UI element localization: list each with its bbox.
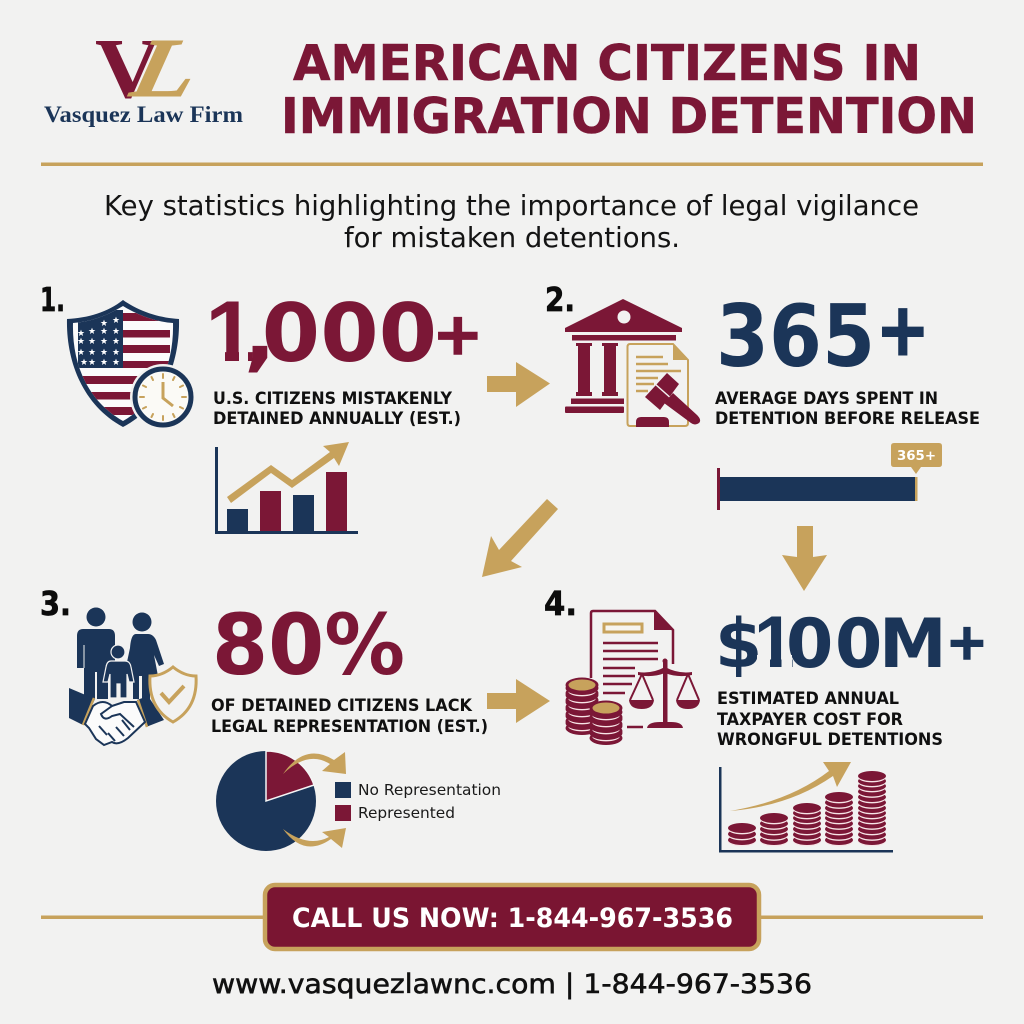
big number: $100M+: $ — [715, 605, 762, 684]
big number: 365+: + — [876, 289, 930, 373]
description: ESTIMATED ANNUAL — [717, 688, 899, 708]
big number: 1,000+: 1 — [205, 283, 255, 380]
legend: No Representation — [358, 781, 501, 799]
panel: stat 2 — [545, 280, 980, 510]
number label 2: 2. — [545, 280, 575, 319]
big number: 80%: 80% — [212, 596, 405, 694]
arrow: 2 to 4 — [782, 526, 827, 591]
subtitle: for mistaken detentions. — [344, 221, 680, 254]
logo: Vasquez Law Firm: V — [95, 20, 161, 116]
description: TAXPAYER COST FOR — [717, 709, 903, 729]
big number: 1,000+: , — [244, 288, 276, 381]
panel: stat 4 — [544, 584, 988, 852]
big number: $100M+: + — [946, 613, 988, 671]
call to action button: CALL US NOW: 1-844-967-3536 — [292, 903, 733, 934]
big number: 1,000+: + — [432, 301, 483, 369]
icon: courthouse, document and gavel — [565, 299, 700, 427]
icon: flag shield with clock — [67, 300, 196, 430]
big number: $100M+ — [715, 602, 988, 684]
description: DETENTION BEFORE RELEASE — [715, 408, 980, 428]
footer contact line: www.vasquezlawnc.com | 1-844-967-3536 — [212, 969, 812, 1000]
description: LEGAL REPRESENTATION (EST.) — [211, 716, 488, 736]
big number: 1,000+: 0 — [320, 288, 379, 381]
big number: 365+: 3 — [716, 288, 769, 387]
description — [211, 695, 488, 736]
big number: 365+: 6 — [769, 288, 822, 387]
arrow: 1 to 2 — [487, 362, 550, 407]
description — [213, 388, 461, 428]
big number: 365+: 5 — [822, 288, 875, 387]
arrow: 3 to 4 — [487, 679, 550, 723]
logo: Vasquez Law Firm: Vasquez Law Firm — [44, 102, 243, 127]
subtitle — [104, 189, 919, 254]
description — [717, 688, 943, 749]
big number: 1,000+ — [200, 283, 483, 381]
big number: 1,000+: 0 — [262, 288, 320, 381]
subtitle: Key statistics highlighting the importance of legal vigilance — [104, 189, 919, 222]
call to action button — [265, 885, 759, 949]
panel: stat 3 — [40, 584, 501, 851]
title: IMMIGRATION DETENTION — [281, 88, 977, 145]
big number: $100M+: 0 — [835, 605, 882, 684]
progress bar with 365+ marker: 365+ — [897, 449, 936, 464]
coin stack chart with arrow — [719, 762, 893, 852]
number label 3: 3. — [40, 584, 71, 623]
legend: Represented — [358, 804, 455, 822]
big number: $100M+: 0 — [786, 605, 833, 684]
description: U.S. CITIZENS MISTAKENLY — [213, 388, 453, 408]
bar chart with trend arrow — [215, 442, 358, 534]
curved arrow: bottom — [283, 828, 346, 848]
panel: stat 1 — [40, 280, 483, 534]
description — [715, 388, 980, 428]
title: AMERICAN CITIZENS IN — [293, 35, 921, 92]
icon: family, handshake and shield — [69, 608, 196, 745]
big number: $100M+: M — [879, 605, 947, 684]
curved arrow: top — [283, 752, 346, 774]
big number: 1,000+: 0 — [379, 288, 437, 381]
description: OF DETAINED CITIZENS LACK — [211, 695, 473, 715]
description: WRONGFUL DETENTIONS — [717, 729, 943, 749]
number label 4: 4. — [544, 584, 577, 623]
description: DETAINED ANNUALLY (EST.) — [213, 408, 461, 428]
legend — [335, 781, 501, 822]
progress bar with 365+ marker — [717, 443, 942, 510]
number label 1: 1. — [40, 280, 65, 319]
description: AVERAGE DAYS SPENT IN — [715, 388, 938, 408]
logo: Vasquez Law Firm: L — [118, 23, 219, 115]
big number: $100M+: 1 — [754, 602, 795, 683]
arrow: 2 to 3 — [482, 499, 558, 577]
logo: Vasquez Law Firm — [44, 20, 243, 127]
title — [281, 35, 977, 145]
icon: document, scales and coins — [566, 611, 700, 745]
pie chart — [216, 751, 346, 851]
